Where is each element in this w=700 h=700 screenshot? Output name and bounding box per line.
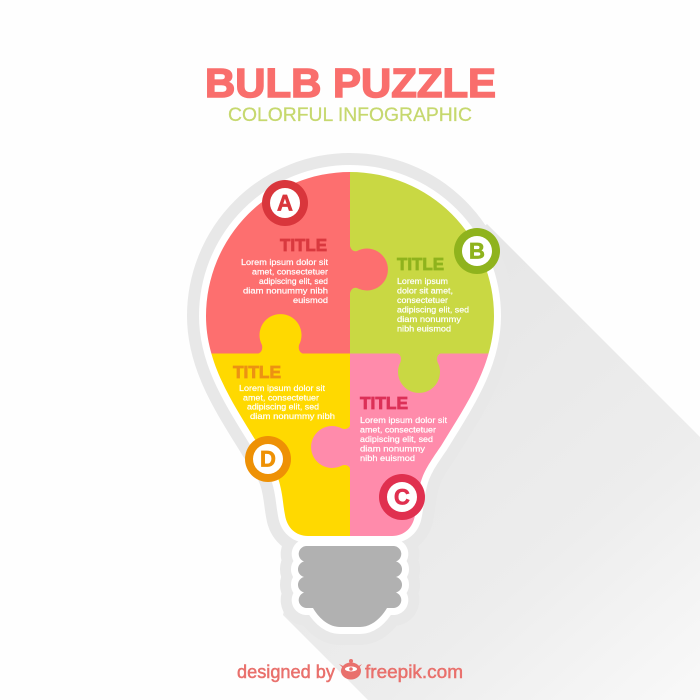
footer credit: [237, 659, 463, 682]
puzzle pieces: [200, 165, 500, 544]
badge D: D: [260, 446, 276, 472]
piece D: [211, 354, 350, 536]
piece B: [350, 165, 500, 354]
body C: [360, 415, 448, 463]
body D: adipiscing elit, sed: [247, 402, 319, 412]
badge D: [245, 436, 291, 482]
body A: diam nonummy nibh: [243, 286, 328, 296]
body C: nibh euismod: [360, 453, 415, 463]
body A: [241, 257, 329, 305]
panel A text: [241, 235, 329, 305]
body B: dolor sit amet,: [397, 286, 453, 296]
subtitle: COLORFUL INFOGRAPHIC: [228, 104, 472, 126]
body D: diam nonummy nibh: [250, 411, 335, 421]
body D: [239, 383, 335, 421]
title C: TITLE: [360, 393, 408, 413]
tab A into B: [350, 246, 388, 293]
panel C text: [360, 393, 448, 463]
bulb screw base: [298, 546, 402, 627]
long shadow: [283, 224, 700, 700]
piece C: [350, 354, 488, 536]
panel D text: [233, 362, 335, 421]
body C: amet, consectetuer: [360, 424, 436, 434]
body B: Lorem ipsum: [397, 276, 448, 286]
footer credit: freepik.com: [365, 661, 463, 682]
icon: freepik mascot: [339, 659, 362, 680]
badge C: C: [394, 484, 410, 510]
body D: amet, consectetuer: [243, 392, 319, 402]
tab C into D: [311, 424, 350, 470]
title A: TITLE: [280, 235, 327, 255]
lightbulb: [200, 165, 500, 627]
bulb outline: [206, 172, 494, 627]
badge A: A: [277, 190, 293, 216]
body A: euismod: [293, 295, 328, 305]
body A: adipiscing elit, sed: [259, 276, 328, 286]
panel B text: [397, 254, 469, 334]
badge C: [379, 474, 425, 520]
body B: consectetuer: [397, 295, 448, 305]
footer credit: designed by: [237, 661, 336, 682]
tab B into C: [396, 353, 442, 393]
body A: amet, consectetuer: [252, 266, 328, 276]
body B: nibh euismod: [397, 324, 451, 334]
body B: adipiscing elit, sed: [397, 304, 469, 314]
badge B: [454, 228, 500, 274]
title D: TITLE: [233, 362, 281, 382]
title: BULB PUZZLE: [205, 60, 496, 106]
body C: Lorem ipsum dolor sit: [360, 415, 448, 425]
body A: Lorem ipsum dolor sit: [241, 257, 329, 267]
title B: TITLE: [397, 254, 444, 274]
badge B: B: [469, 238, 485, 264]
body B: diam nonummy: [397, 314, 462, 324]
body B: [397, 276, 469, 334]
piece A: [200, 165, 350, 354]
body C: diam nonummy: [360, 444, 426, 454]
badge A: [262, 180, 308, 226]
body C: adipiscing elit, sed: [360, 434, 433, 444]
body D: Lorem ipsum dolor sit: [239, 383, 326, 393]
tab D into A: [257, 314, 304, 354]
